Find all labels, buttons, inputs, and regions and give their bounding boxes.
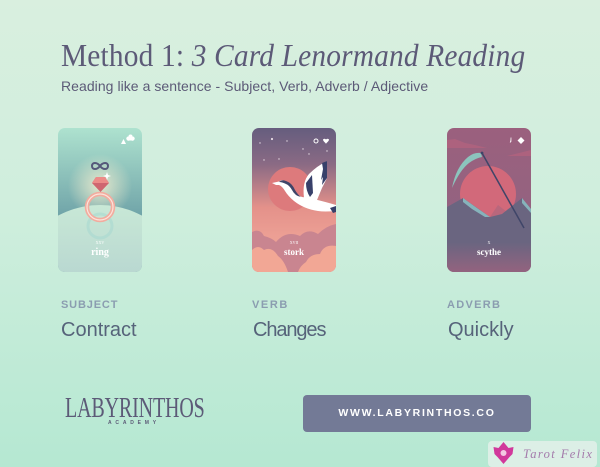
value: changes: Changes: [253, 319, 325, 341]
card: stork: stork: [284, 247, 304, 257]
card: stork: [252, 128, 336, 272]
subtitle: Reading like a sentence - Subject, Verb, Adverb / Adjective: [61, 78, 428, 94]
logo: labyrinthos academy: ACADEMY: [108, 420, 160, 426]
card: stork: XVII: [290, 240, 299, 245]
card: scythe: scythe: [477, 247, 501, 257]
label: verb: VERB: [252, 299, 289, 311]
value: quickly: Quickly: [448, 319, 514, 341]
card: ring: ring: [91, 247, 109, 258]
card: ring: XXV: [96, 240, 104, 245]
watermark text: Tarot Felix: [523, 447, 593, 461]
card: scythe: X: [488, 240, 491, 245]
title: Method 1: 3 Card Lenormand Reading: [61, 38, 525, 73]
watermark: tarot felix: [488, 441, 597, 467]
button: website: [303, 395, 531, 432]
card: scythe: [447, 128, 531, 272]
logo: labyrinthos academy: LABYRINTHOS: [65, 392, 205, 424]
label: adverb: ADVERB: [447, 299, 501, 311]
button: website: WWW.LABYRINTHOS.CO: [338, 407, 496, 419]
label: subject: SUBJECT: [61, 299, 118, 311]
value: contract: Contract: [61, 319, 137, 341]
icon: lotus: [494, 442, 514, 464]
card: ring: [58, 128, 142, 272]
